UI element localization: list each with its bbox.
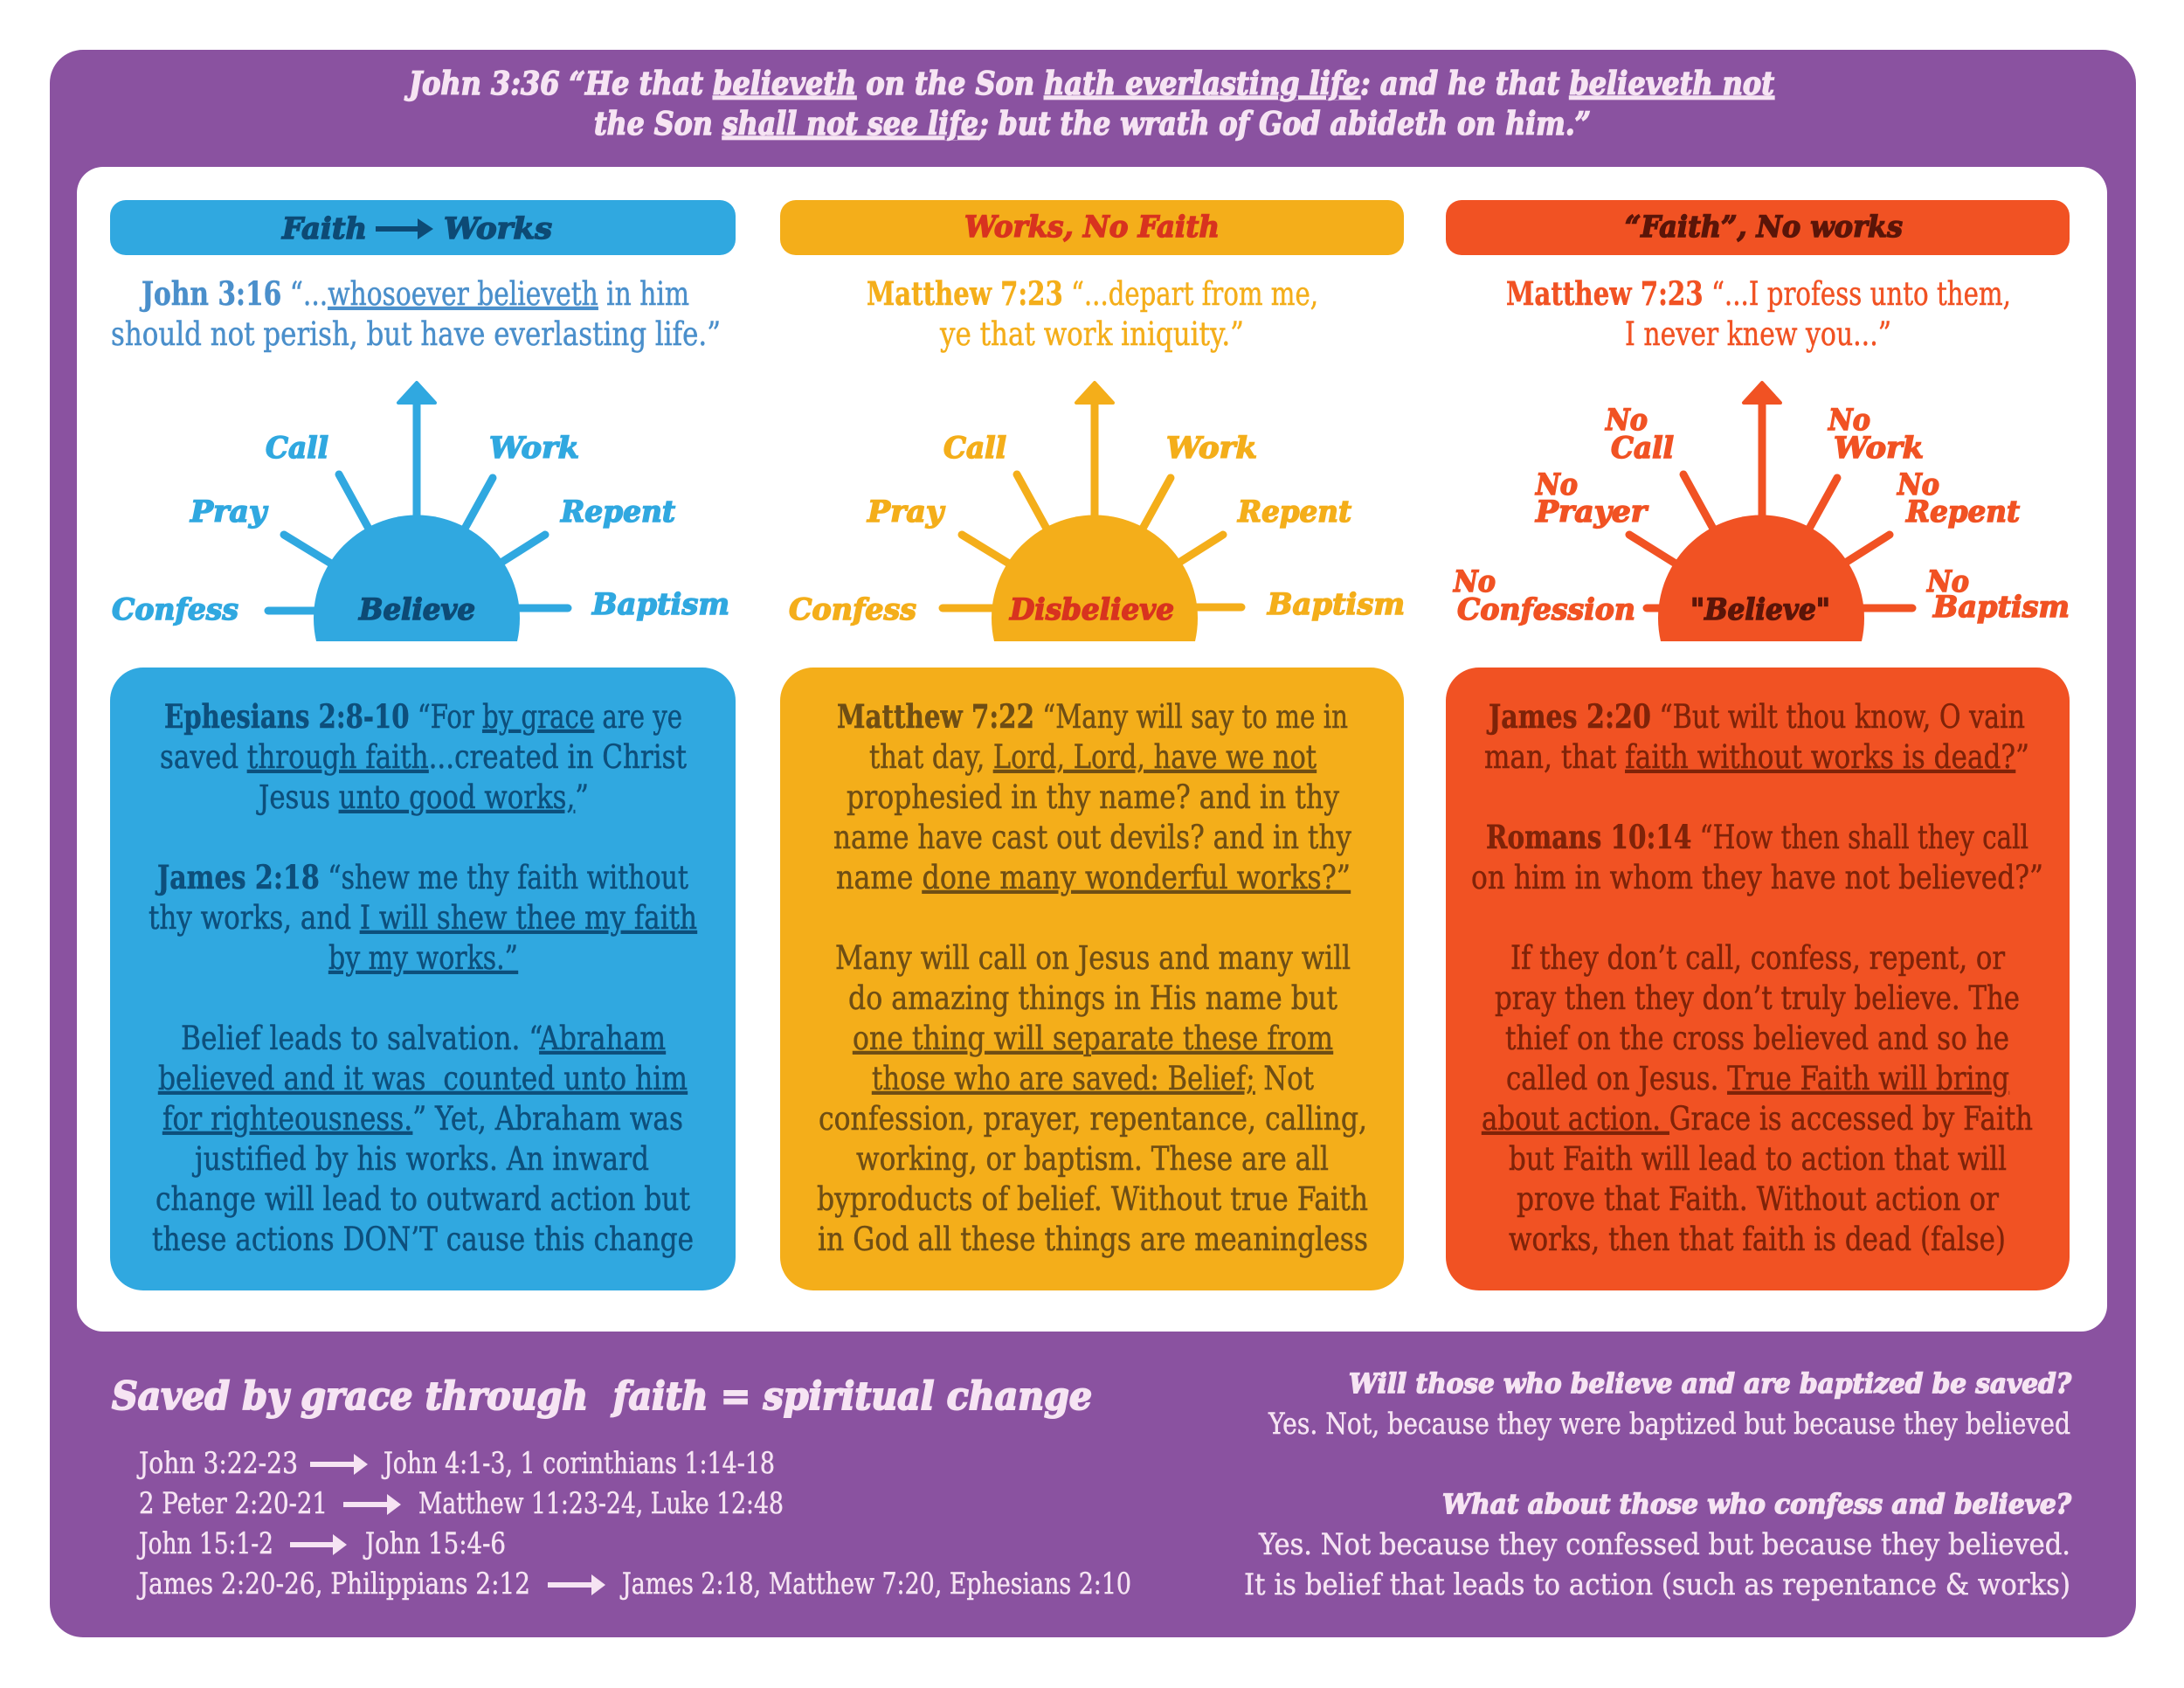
sunburst diagram: Believe: Believe xyxy=(358,592,475,627)
sunburst diagram: Disbelieve: Repent xyxy=(1237,495,1351,529)
reference list with arrows: James 2:18, Matthew 7:20, Ephesians 2:10 xyxy=(620,1567,1131,1602)
sunburst diagram: "Believe": No xyxy=(1926,564,1969,599)
sunburst diagram: Disbelieve xyxy=(789,383,1405,641)
sunburst diagram: Disbelieve: Call xyxy=(943,431,1006,466)
text card: blue: James 2:18 “shew me thy faith without xyxy=(156,858,688,896)
reference list with arrows: John 15:4-6 xyxy=(363,1526,506,1561)
column: "Faith", No works xyxy=(1446,200,2070,1290)
text card: blue: for righteousness.” Yet, Abraham was xyxy=(162,1100,683,1138)
column header: "Faith", No works: “Faith”, No works xyxy=(1625,210,1903,245)
sunburst diagram: "Believe": Repent xyxy=(1905,495,2020,529)
text card: orange: works, then that faith is dead (false) xyxy=(1509,1221,2006,1258)
text card: yellow: Matthew 7:22 “Many will say to me in xyxy=(837,697,1348,736)
reference list with arrows: Matthew 11:23-24, Luke 12:48 xyxy=(418,1486,784,1521)
sunburst diagram: "Believe" xyxy=(1453,383,2070,641)
answer: confess xyxy=(1244,1527,2070,1602)
sunburst diagram: Believe: Repent xyxy=(560,495,675,529)
title quote: John 3:36: the Son shall not see life; but the wrath of God abideth on him.” xyxy=(594,106,1591,142)
column header: Faith → Works: Faith xyxy=(281,211,367,246)
text card: orange: on him in whom they have not believed?” xyxy=(1471,859,2043,896)
sunburst diagram: Believe: Call xyxy=(266,431,328,466)
reference list with arrows: John 4:1-3, 1 corinthians 1:14-18 xyxy=(382,1446,775,1481)
sunburst diagram: "Believe": No xyxy=(1897,467,1939,502)
reference list with arrows: John 15:1-2 xyxy=(137,1526,273,1561)
sunburst diagram: Disbelieve: Work xyxy=(1166,431,1257,466)
sunburst diagram: "Believe": "Believe" xyxy=(1690,592,1830,627)
text card: orange: James 2:20 “But wilt thou know, O vain xyxy=(1487,697,2025,736)
text card: blue: thy works, and I will shew thee my faith xyxy=(149,899,697,937)
column header: Faith → Works xyxy=(110,200,736,255)
verse: Matthew 7:23 depart: ye that work iniquity.” xyxy=(939,315,1244,353)
title quote: John 3:36: John 3:36 “He that believeth on the Son hath everlasting life: and he that believeth not xyxy=(404,66,1774,102)
sunburst diagram: Believe xyxy=(112,383,729,641)
text card: blue: Jesus unto good works,” xyxy=(256,778,589,816)
text card: blue: justified by his works. An inward xyxy=(192,1140,649,1178)
text card: yellow: prophesied in thy name? and in thy xyxy=(847,778,1339,816)
verse: John 3:16: John 3:16 “...whosoever believeth in him xyxy=(140,274,689,313)
sunburst diagram: "Believe": No xyxy=(1605,403,1648,438)
text card: orange: called on Jesus. True Faith will bring xyxy=(1506,1060,2009,1097)
text card: yellow xyxy=(780,668,1404,1290)
sunburst diagram: Believe: Pray xyxy=(190,495,268,529)
text card: orange: If they don’t call, confess, repent, or xyxy=(1510,939,2005,977)
sunburst diagram: Believe: Work xyxy=(489,431,579,466)
sunburst diagram: Disbelieve: Baptism xyxy=(1267,587,1405,622)
column header: Faith → Works: Works xyxy=(444,211,552,246)
text card: yellow: name have cast out devils? and in thy xyxy=(833,819,1351,856)
white content panel xyxy=(77,167,2107,1332)
reference list with arrows xyxy=(137,1446,1131,1602)
sunburst diagram: Believe: Baptism xyxy=(591,587,729,622)
text card: orange: Romans 10:14 “How then shall they call xyxy=(1486,818,2028,856)
question: believe and baptized: Will those who believe and are baptized be saved? xyxy=(1349,1368,2072,1400)
verse: John 3:16: should not perish, but have everlasting life.” xyxy=(111,315,721,353)
text card: yellow: one thing will separate these from xyxy=(853,1020,1333,1057)
verse: Matthew 7:23 profess: Matthew 7:23 “...I profess unto them, xyxy=(1506,274,2011,313)
reference list with arrows: James 2:20-26, Philippians 2:12 xyxy=(137,1567,530,1602)
footer heading: Saved by grace through faith = spiritual change xyxy=(112,1374,1092,1419)
text card: orange xyxy=(1446,668,2070,1290)
reference list with arrows: John 3:22-23 xyxy=(137,1446,298,1481)
text card: blue: Belief leads to salvation. “Abraham xyxy=(181,1020,666,1057)
sunburst diagram: Believe: Confess xyxy=(112,592,238,627)
verse: John 3:16 xyxy=(111,274,721,353)
text card: yellow: do amazing things in His name but xyxy=(848,979,1337,1017)
verse: Matthew 7:23 depart xyxy=(867,274,1318,353)
text card: blue: saved through faith...created in Christ xyxy=(160,738,687,776)
verse: Matthew 7:23 profess xyxy=(1506,274,2011,353)
footer left: saved by grace xyxy=(112,1374,1131,1602)
text card: orange: about action. Grace is accessed by Faith xyxy=(1482,1100,2033,1138)
sunburst diagram: Disbelieve: Confess xyxy=(789,592,916,627)
text card: yellow: name done many wonderful works?” xyxy=(836,859,1351,896)
text card: orange: man, that faith without works is dead?” xyxy=(1484,738,2029,776)
text card: blue xyxy=(110,668,736,1290)
sunburst diagram: "Believe": Prayer xyxy=(1535,495,1648,529)
column header: Works, No Faith: Works, No Faith xyxy=(964,210,1220,245)
text card: blue: change will lead to outward action but xyxy=(156,1180,690,1218)
text card: yellow: byproducts of belief. Without true Faith xyxy=(817,1180,1368,1218)
title quote: John 3:36 xyxy=(404,66,1774,142)
text card: blue: believed and it was counted unto him xyxy=(158,1060,688,1097)
sunburst diagram: "Believe": Call xyxy=(1611,431,1674,466)
verse: Matthew 7:23 profess: I never knew you...” xyxy=(1625,315,1891,353)
text card: orange: prove that Faith. Without action or xyxy=(1517,1180,1999,1218)
text card: yellow: in God all these things are meaningless xyxy=(818,1221,1368,1258)
column header: "Faith", No works xyxy=(1446,200,2070,255)
column: Works, No Faith xyxy=(780,200,1405,1290)
sunburst diagram: "Believe": Confession xyxy=(1457,592,1635,627)
sunburst diagram: "Believe": No xyxy=(1828,403,1870,438)
column header: Works, No Faith xyxy=(780,200,1404,255)
text card: blue: these actions DON’T cause this change xyxy=(152,1221,694,1258)
text card: blue: by my works.” xyxy=(328,939,518,977)
text card: yellow: those who are saved: Belief; Not xyxy=(872,1060,1314,1097)
text card: blue: Ephesians 2:8-10 “For by grace are ye xyxy=(164,697,682,736)
answer: confess: It is belief that leads to action (such as repentance & works) xyxy=(1244,1567,2070,1602)
verse: Matthew 7:23 depart: Matthew 7:23 “...depart from me, xyxy=(867,274,1318,313)
sunburst diagram: "Believe": No xyxy=(1535,467,1578,502)
text card: yellow: confession, prayer, repentance, calling, xyxy=(819,1100,1367,1138)
text card: orange: pray then they don’t truly believe. The xyxy=(1495,979,2020,1017)
sunburst diagram: Disbelieve: Disbelieve xyxy=(1009,592,1174,627)
answer: confess: Yes. Not because they confessed but because they believed. xyxy=(1258,1527,2070,1562)
sunburst diagram: "Believe": No xyxy=(1453,564,1496,599)
footer right: questions xyxy=(1244,1368,2072,1602)
sunburst diagram: "Believe": Baptism xyxy=(1932,590,2070,625)
text card: orange: but Faith will lead to action that will xyxy=(1509,1140,2007,1178)
question: confess and believe: What about those who confess and believe? xyxy=(1442,1489,2072,1520)
text card: yellow: working, or baptism. These are all xyxy=(856,1140,1329,1178)
text card: yellow: Many will call on Jesus and many will xyxy=(835,939,1351,977)
reference list with arrows: 2 Peter 2:20-21 xyxy=(139,1486,328,1521)
sunburst diagram: Disbelieve: Pray xyxy=(867,495,945,529)
text card: yellow: that day, Lord, Lord, have we not xyxy=(869,738,1317,776)
sunburst diagram: "Believe": Work xyxy=(1834,431,1924,466)
column: Faith leads to Works xyxy=(110,200,736,1290)
text card: orange: thief on the cross believed and so he xyxy=(1505,1020,2009,1057)
